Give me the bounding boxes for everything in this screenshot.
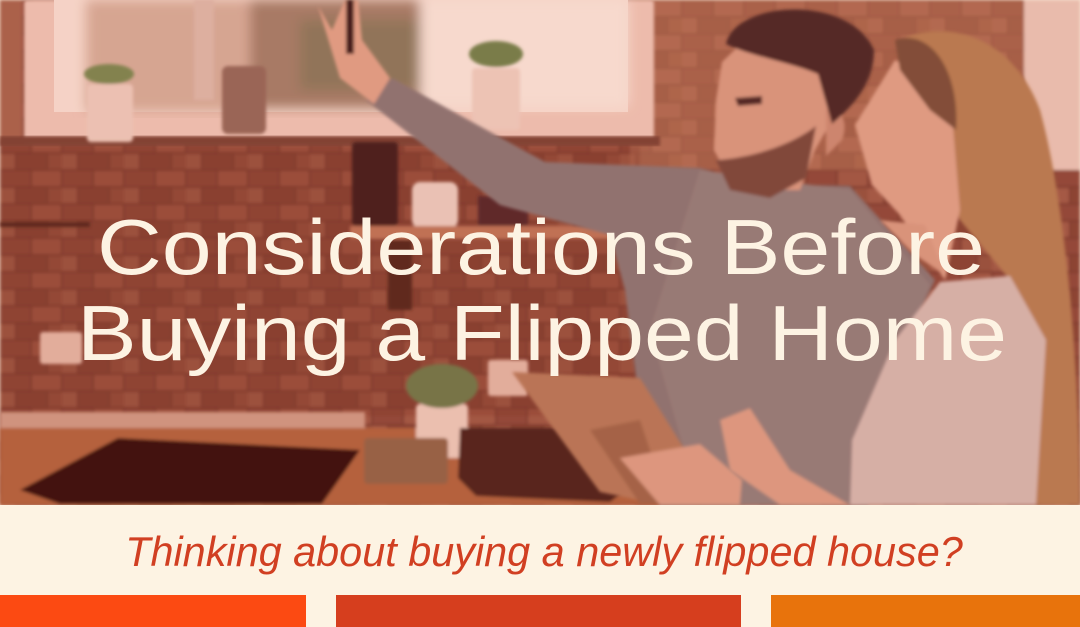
colour bar: left: [0, 595, 306, 627]
window: [0, 0, 660, 146]
headline: [77, 203, 1007, 377]
colour bar: right: [771, 595, 1080, 627]
headline line 2: Buying a Flipped Home: [77, 289, 1007, 377]
subheading band: [0, 505, 1080, 627]
man: [318, 0, 935, 505]
counter and hob: [0, 364, 660, 505]
subheading: Thinking about buying a newly flipped house?: [125, 529, 963, 575]
clipboard and hands: [512, 372, 742, 505]
woman: [720, 31, 1080, 505]
headline line 1: Considerations Before: [97, 203, 985, 291]
shelf with jars: [0, 142, 610, 396]
window sill items: [84, 0, 523, 142]
colour bar: middle: [336, 595, 741, 627]
